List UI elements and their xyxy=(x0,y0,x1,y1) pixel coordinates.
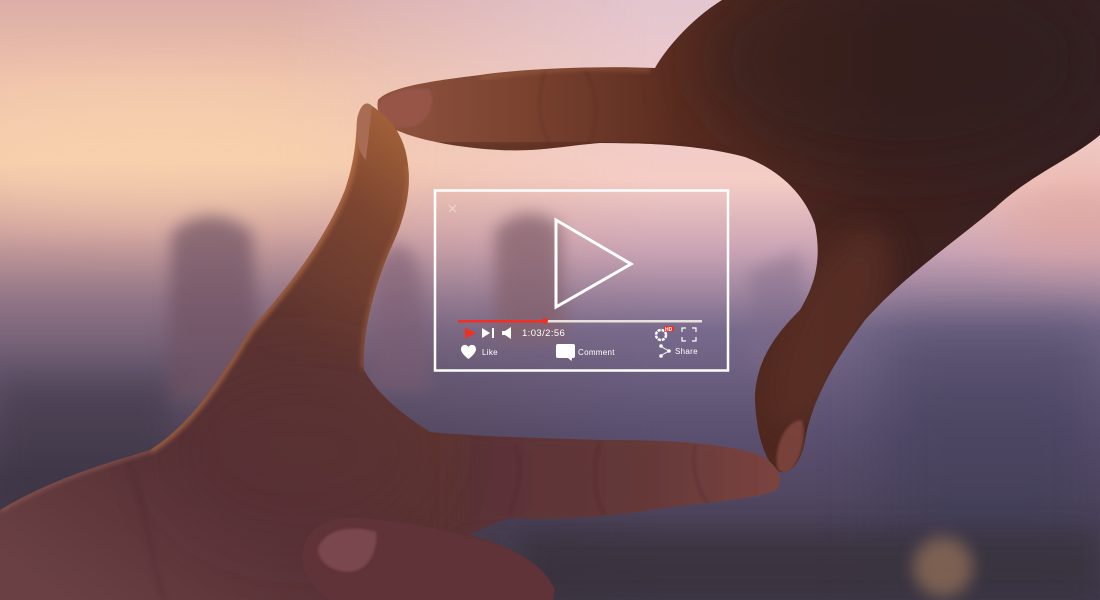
like button xyxy=(461,345,498,359)
small play button xyxy=(465,328,476,339)
next button xyxy=(482,328,494,338)
video player frame xyxy=(435,190,728,370)
settings gear with HD badge: HD xyxy=(665,327,673,333)
share button xyxy=(659,344,698,358)
progress bar xyxy=(458,318,702,324)
index fingernail xyxy=(377,89,432,128)
middle fingernail xyxy=(777,420,804,474)
background: blurred city towers xyxy=(0,214,1100,600)
large play triangle xyxy=(556,220,631,307)
volume icon xyxy=(502,327,511,339)
curled finger xyxy=(303,525,552,600)
fullscreen icon xyxy=(682,328,696,341)
curled fingernail xyxy=(318,529,376,572)
close icon xyxy=(449,205,456,212)
time readout: 1:03/2:56 xyxy=(522,328,565,339)
like button: Like xyxy=(482,348,498,357)
comment button: Comment xyxy=(578,348,615,357)
comment button xyxy=(556,344,615,361)
share button: Share xyxy=(675,347,698,356)
settings gear with HD badge xyxy=(656,326,674,340)
left hand: thumb, palm and lower fingers xyxy=(0,90,800,600)
right hand: index finger and palm xyxy=(370,0,1100,480)
thumbnail edge xyxy=(357,104,372,160)
